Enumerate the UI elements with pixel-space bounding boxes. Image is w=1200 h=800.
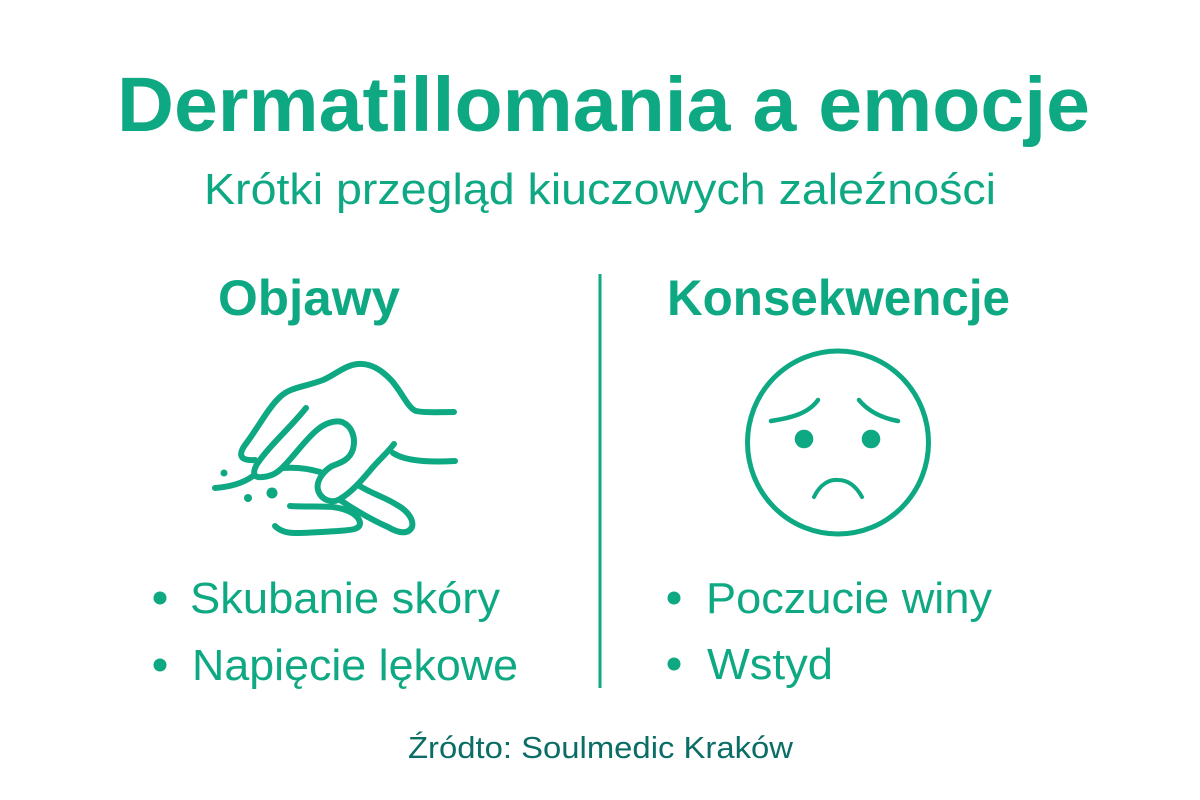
icon: sad face bbox=[748, 351, 928, 534]
center divider bbox=[598, 274, 602, 688]
icon: hand picking skin bbox=[215, 364, 455, 533]
heading: Konsekwencje: Konsekwencje bbox=[667, 270, 1010, 326]
title: Dermatillomania a emocje bbox=[117, 62, 1090, 148]
bullet item: Wstyd: Wstyd bbox=[707, 640, 833, 689]
bullet item: Skubanie skóry: Skubanie skóry bbox=[190, 574, 500, 623]
subtitle: Krótki przegląd kiuczowych zaleźności bbox=[204, 165, 996, 214]
bullet item: Napięcie lękowe: Napięcie lękowe bbox=[192, 641, 518, 690]
list: konsekwencje bbox=[668, 574, 992, 689]
source note: Źródto: Soulmedic Kraków bbox=[408, 730, 794, 765]
bullet item: Poczucie winy: Poczucie winy bbox=[706, 574, 992, 623]
heading: Objawy: Objawy bbox=[218, 270, 400, 326]
list: objawy bbox=[154, 574, 518, 690]
